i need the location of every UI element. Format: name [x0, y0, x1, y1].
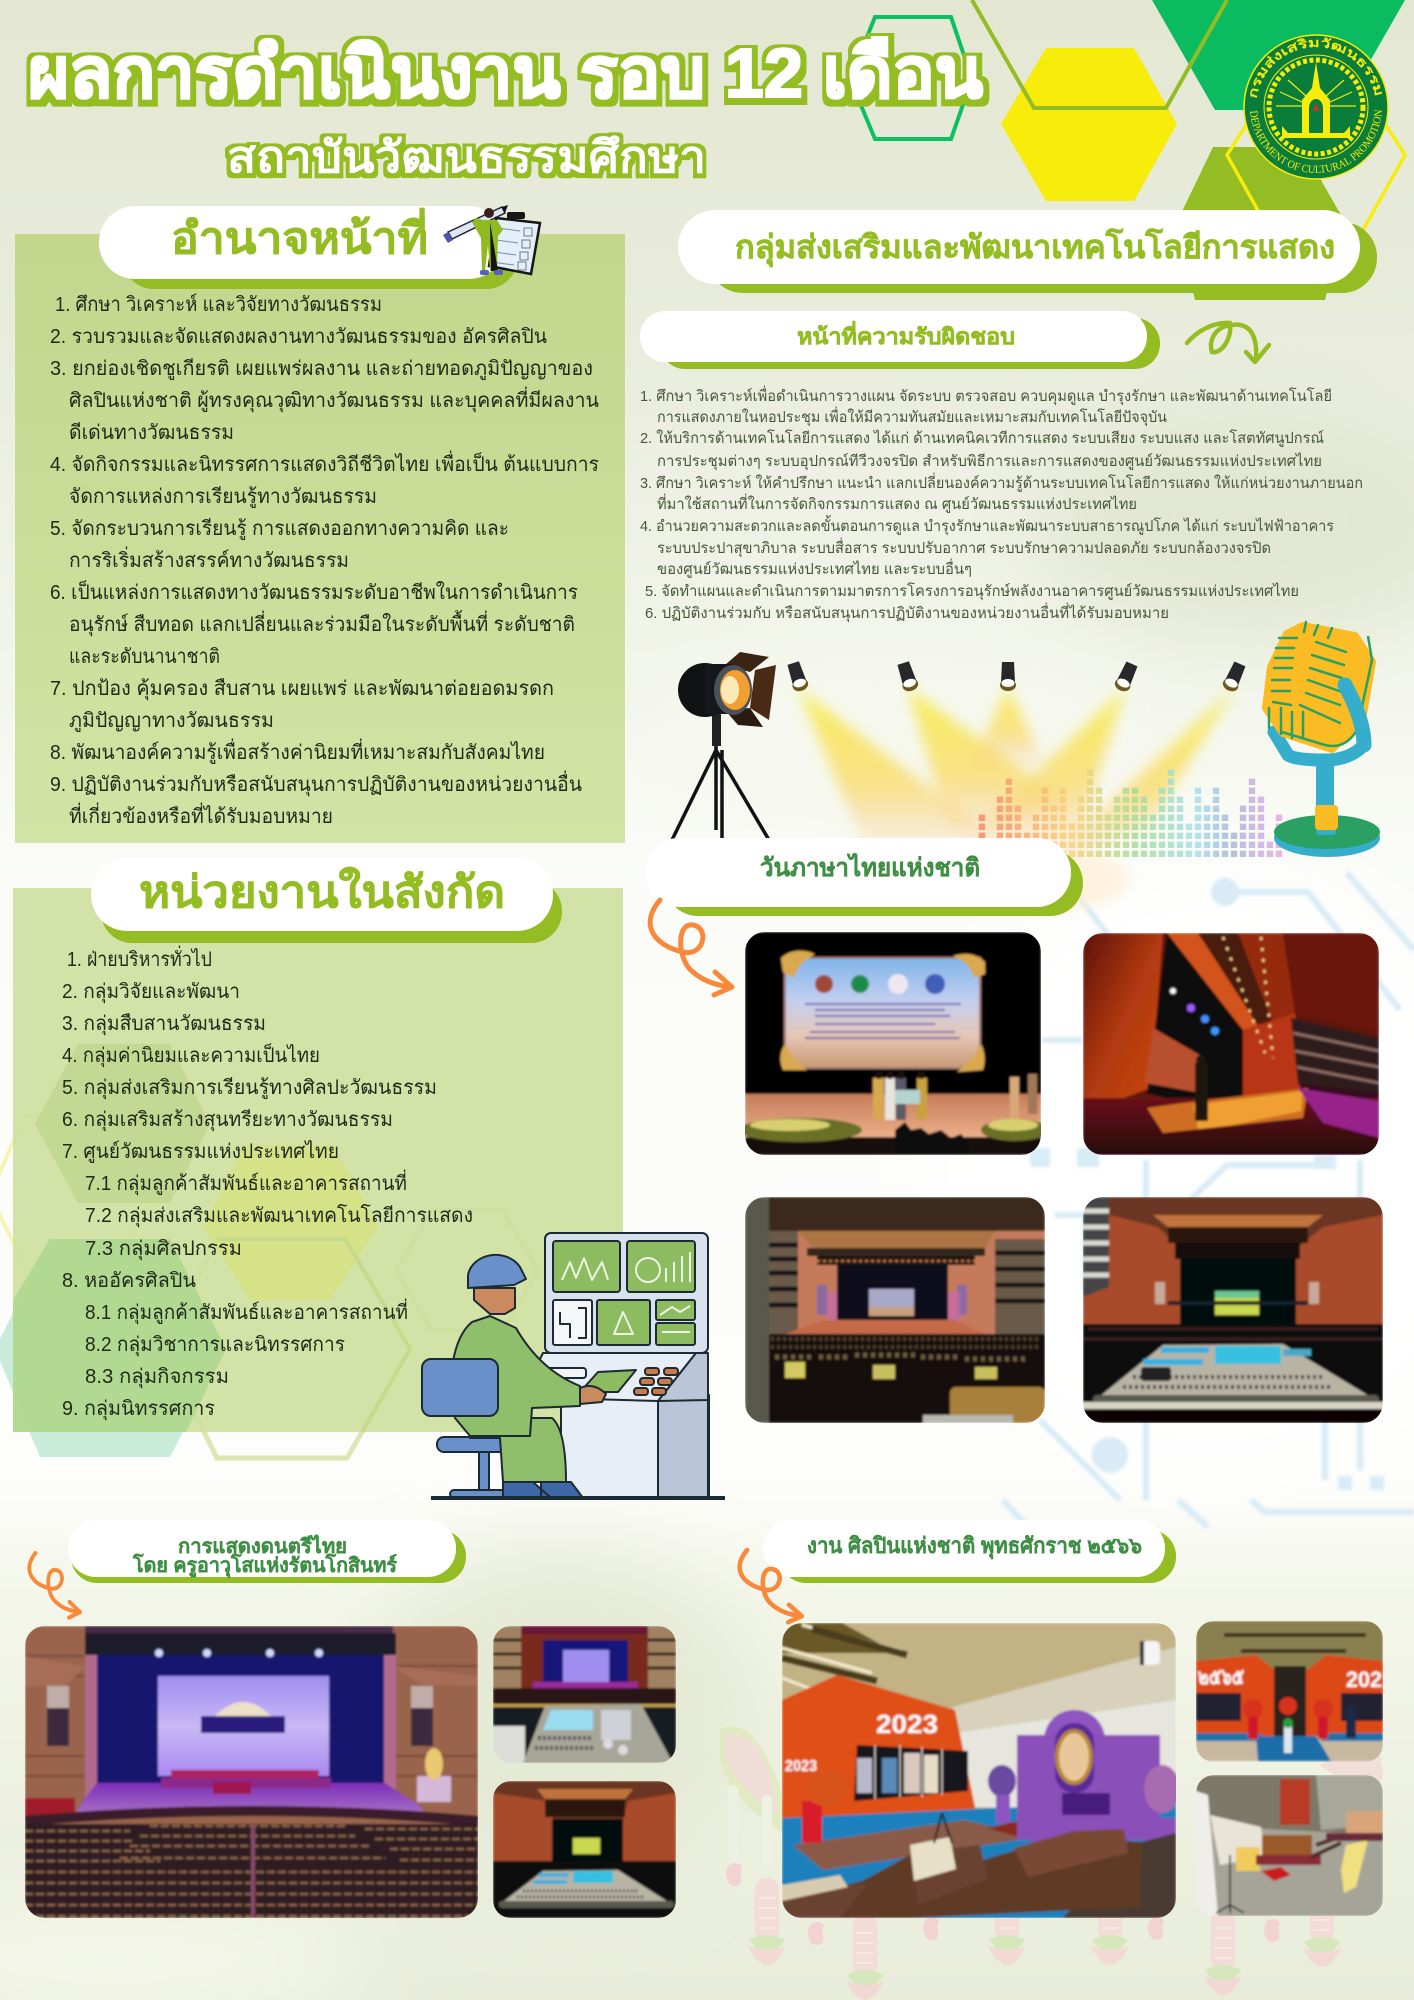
list: responsibilities: 1. ศึกษา วิเคราะห์เพื่อดำเนินการวางแผน จัดระบบ ตรวจสอบ ควบคุมดูแล บำรุงรักษา และพัฒนาด้านเทคโนโลยี	[640, 385, 1332, 406]
list: affiliated units: 5. กลุ่มส่งเสริมการเรียนรู้ทางศิลปะวัฒนธรรม	[62, 1077, 437, 1100]
emblem: department of cultural promotion: DEPARTMENT OF CULTURAL PROMOTION	[1250, 110, 1382, 173]
photo: exhibit entrance	[1196, 1621, 1383, 1761]
hexagon: solid green	[1152, 0, 1405, 110]
arrow: orange curl	[650, 900, 732, 995]
list: affiliated units: 4. กลุ่มค่านิยมและความเป็นไทย	[62, 1042, 320, 1068]
list: authority items: 6. เป็นแหล่งการแสดงทางวัฒนธรรมระดับอาชีพในการดำเนินการ	[50, 579, 578, 604]
heading pill: performance technology group	[678, 210, 1377, 293]
list: authority items: 7. ปกป้อง คุ้มครอง สืบสาน เผยแพร่ และพัฒนาต่อยอดมรดก	[50, 678, 554, 701]
list: authority items: ดีเด่นทางวัฒนธรรม	[69, 422, 234, 444]
emblem: department of cultural promotion	[1243, 34, 1389, 180]
list: responsibilities: ระบบประปาสุขาภิบาล ระบบสื่อสาร ระบบปรับอากาศ ระบบรักษาความปลอดภัย ระบบกล้องวงจรปิด	[657, 537, 1271, 558]
heading pill: national thai language day: วันภาษาไทยแห่งชาติ	[760, 852, 980, 882]
hexagon: olive outline	[972, 0, 1227, 108]
photo: lighting console with stage	[1083, 1197, 1383, 1423]
list: affiliated units: 1. ฝ่ายบริหารทั่วไป	[67, 945, 212, 971]
chair seat and base	[437, 1437, 531, 1498]
list: authority items: 8. พัฒนาองค์ความรู้เพื่อสร้างค่านิยมที่เหมาะสมกับสังคมไทย	[50, 738, 545, 765]
list: responsibilities: ที่มาใช้สถานที่ในการจัดกิจกรรมการแสดง ณ ศูนย์วัฒนธรรมแห่งประเทศไทย	[657, 493, 1137, 513]
stage lights illustration	[672, 622, 1380, 910]
list: authority items: 3. ยกย่องเชิดชูเกียรติ เผยแพร่ผลงาน และถ่ายทอดภูมิปัญญาของ	[50, 358, 593, 381]
hexagon: green outline	[850, 17, 972, 139]
list: authority items: ที่เกี่ยวข้องหรือที่ได้รับมอบหมาย	[69, 802, 333, 828]
chair back	[422, 1359, 498, 1416]
list: responsibilities: 2. ให้บริการด้านเทคโนโลยีการแสดง ได้แก่ ด้านเทคนิคเวทีการแสดง ระบบเสียง ระบบแสง และโสตทัศนูปกรณ์	[640, 429, 1324, 447]
list: authority items: 9. ปฏิบัติงานร่วมกับหรือสนับสนุนการปฏิบัติงานของหน่วยงานอื่น	[50, 770, 582, 797]
light beams	[798, 688, 1235, 910]
list: authority items: 2. รวบรวมและจัดแสดงผลงานทางวัฒนธรรมของ อัครศิลปิน	[50, 326, 547, 348]
list: authority items: และระดับนานาชาติ	[69, 646, 220, 668]
garland decoration	[720, 1726, 1383, 2000]
photo: national artist 2023 exhibit: 2023	[876, 1709, 938, 1739]
decorative circuit lines	[1003, 873, 1414, 1527]
floor line	[431, 1496, 725, 1500]
hexagon: solid olive	[1177, 147, 1345, 300]
heading pill: responsibilities: หน้าที่ความรับผิดชอบ	[797, 320, 1015, 349]
small stage lamps	[786, 661, 1247, 694]
list: affiliated units: 7.3 กลุ่มศิลปกรรม	[85, 1238, 242, 1261]
list: authority items: 5. จัดกระบวนการเรียนรู้ การแสดงออกทางความคิด และ	[50, 518, 509, 541]
heading pill: affiliated units: หน่วยงานในสังกัด	[139, 866, 505, 917]
list: affiliated units: 9. กลุ่มนิทรรศการ	[62, 1398, 215, 1421]
illustration: technician at control console	[422, 1233, 725, 1498]
list: authority items: 1. ศึกษา วิเคราะห์ และวิจัยทางวัฒนธรรม	[55, 293, 382, 316]
hexagon: yellow outline	[1227, 88, 1405, 232]
list: authority items: 4. จัดกิจกรรมและนิทรรศการแสดงวิถีชีวิตไทย เพื่อเป็น ต้นแบบการ	[50, 450, 599, 476]
list: responsibilities: 4. อำนวยความสะดวกและลดขั้นตอนการดูแล บำรุงรักษาและพัฒนาระบบสาธารณูปโภค ได้แก่ ระบบไฟฟ้าอาคาร	[640, 515, 1334, 536]
photo: auditorium with purple stage	[25, 1626, 478, 1918]
list: affiliated units: 7.1 กลุ่มลูกค้าสัมพันธ์และอาคารสถานที่	[85, 1169, 407, 1196]
list: authority items: การริเริ่มสร้างสรรค์ทางวัฒนธรรม	[69, 546, 349, 572]
photo: national artist 2023 exhibit: 2023	[785, 1758, 817, 1775]
hexagon: yellow tint	[203, 1145, 378, 1300]
heading pill: national artist 2566: งาน ศิลปินแห่งชาติ พุทธศักราช ๒๕๖๖	[807, 1533, 1142, 1560]
heading pill: national artist 2566	[763, 1520, 1176, 1583]
arrow: orange curl medium	[740, 1550, 802, 1622]
photo: console small bottom	[493, 1781, 676, 1918]
list: affiliated units: 8.2 กลุ่มวิชาการและนิทรรศการ	[85, 1334, 345, 1357]
photo: exhibit entrance: 202	[1346, 1667, 1382, 1692]
heading pill: responsibilities	[640, 311, 1160, 369]
photo: red lit stage side view	[1083, 933, 1379, 1155]
heading pill: thai music performance: โดย ครูอาวุโสแห่งรัตนโกสินทร์	[132, 1553, 397, 1579]
heading pill: authority	[99, 206, 518, 289]
heading pill: authority: อำนาจหน้าที่	[171, 208, 428, 263]
equalizer bars	[982, 767, 1279, 857]
hexagon: green tint	[35, 1044, 210, 1203]
main title: ผลการดำเนินงาน รอบ 12 เดือน	[28, 34, 983, 112]
heading pill: affiliated units	[91, 858, 562, 943]
list: responsibilities: 5. จัดทำแผนและดำเนินการตามมาตรการโครงการอนุรักษ์พลังงานอาคารศูนย์วัฒนธรรมแห่งประเทศไทย	[645, 582, 1299, 601]
top hexagon decoration	[850, 0, 1405, 300]
list: responsibilities: การประชุมต่างๆ ระบบอุปกรณ์ทีวีวงจรปิด สำหรับพิธีการและการแสดงของศูนย์วัฒนธรรมแห่งประเทศไทย	[657, 452, 1322, 471]
heading pill: national thai language day	[645, 838, 1083, 916]
list: authority items: ศิลปินแห่งชาติ ผู้ทรงคุณวุฒิทางวัฒนธรรม และบุคคลที่มีผลงาน	[69, 386, 599, 413]
list: responsibilities: ของศูนย์วัฒนธรรมแห่งประเทศไทย และระบบอื่นๆ	[657, 558, 972, 578]
photo: stage banner and students	[738, 932, 1049, 1155]
spotlight on tripod	[672, 652, 776, 840]
panel: affiliated units	[13, 858, 623, 1432]
hexagon: olive outline tint	[217, 1239, 410, 1432]
photo: console small top	[493, 1626, 676, 1763]
list: affiliated units: 7.2 กลุ่มส่งเสริมและพัฒนาเทคโนโลยีการแสดง	[85, 1204, 473, 1228]
list: responsibilities	[640, 385, 1363, 623]
list: authority items	[50, 293, 599, 828]
list: affiliated units: 8.3 กลุ่มกิจกรรม	[85, 1366, 229, 1389]
photo: national artist 2023 exhibit	[782, 1623, 1180, 1918]
hexagon: teal tint	[13, 1239, 226, 1432]
subtitle: สถาบันวัฒนธรรมศึกษา	[227, 133, 706, 182]
emblem: department of cultural promotion: กรมส่งเสริมวัฒนธรรม	[1250, 38, 1382, 98]
list: authority items: จัดการแหล่งการเรียนรู้ทางวัฒนธรรม	[69, 486, 377, 509]
technician body	[450, 1255, 606, 1498]
console	[521, 1233, 709, 1498]
heading pill: thai music performance: การแสดงดนตรีไทย	[178, 1534, 347, 1558]
hexagon: green outline	[396, 1210, 538, 1330]
list: responsibilities: การแสดงภายในหอประชุม เพื่อให้มีความทันสมัยและเหมาะสมกับเทคโนโลยีปัจจุบัน	[657, 406, 1167, 427]
microphone	[1266, 622, 1380, 857]
hexagon: teal fill	[0, 1239, 226, 1457]
panel: affiliated units hexagon backdrop	[0, 1117, 538, 1458]
list: affiliated units: 3. กลุ่มสืบสานวัฒนธรรม	[62, 1013, 266, 1036]
list: affiliated units: 6. กลุ่มเสริมสร้างสุนทรียะทางวัฒนธรรม	[62, 1109, 393, 1132]
photo: audience in auditorium	[745, 1197, 1045, 1423]
list: affiliated units: 8.1 กลุ่มลูกค้าสัมพันธ์และอาคารสถานที่	[85, 1298, 408, 1325]
arrow: orange curl small	[29, 1553, 80, 1618]
list: authority items: ภูมิปัญญาทางวัฒนธรรม	[69, 710, 274, 733]
hexagon: olive outline	[163, 1239, 410, 1458]
arrow: green curl	[1187, 323, 1269, 362]
hexagon: yellow outline	[0, 1117, 153, 1269]
list: responsibilities: 3. ศึกษา วิเคราะห์ ให้คำปรึกษา แนะนำ แลกเปลี่ยนองค์ความรู้ด้านระบบเทคโนโลยีการแสดง ให้แก่หน่วยงานภายนอก	[640, 472, 1363, 492]
list: affiliated units	[62, 945, 473, 1421]
photo: ceremonial hall	[1196, 1775, 1383, 1916]
panel: authority	[15, 205, 625, 843]
list: authority items: อนุรักษ์ สืบทอด แลกเปลี่ยนและร่วมมือในระดับพื้นที่ ระดับชาติ	[69, 610, 575, 637]
list: responsibilities: 6. ปฏิบัติงานร่วมกับ หรือสนับสนุนการปฏิบัติงานของหน่วยงานอื่นที่ได้รับมอบหมาย	[645, 602, 1169, 623]
list: affiliated units: 2. กลุ่มวิจัยและพัฒนา	[62, 981, 240, 1004]
list: affiliated units: 8. หออัครศิลปิน	[62, 1270, 196, 1292]
heading pill: thai music performance	[68, 1520, 466, 1583]
heading pill: performance technology group: กลุ่มส่งเสริมและพัฒนาเทคโนโลยีการแสดง	[735, 228, 1335, 268]
list: affiliated units: 7. ศูนย์วัฒนธรรมแห่งประเทศไทย	[62, 1140, 339, 1164]
icon: person with clipboard	[443, 205, 540, 275]
photo: exhibit entrance: ๒๕๖๕	[1198, 1664, 1244, 1689]
hexagon: yellow fill	[1001, 48, 1177, 201]
